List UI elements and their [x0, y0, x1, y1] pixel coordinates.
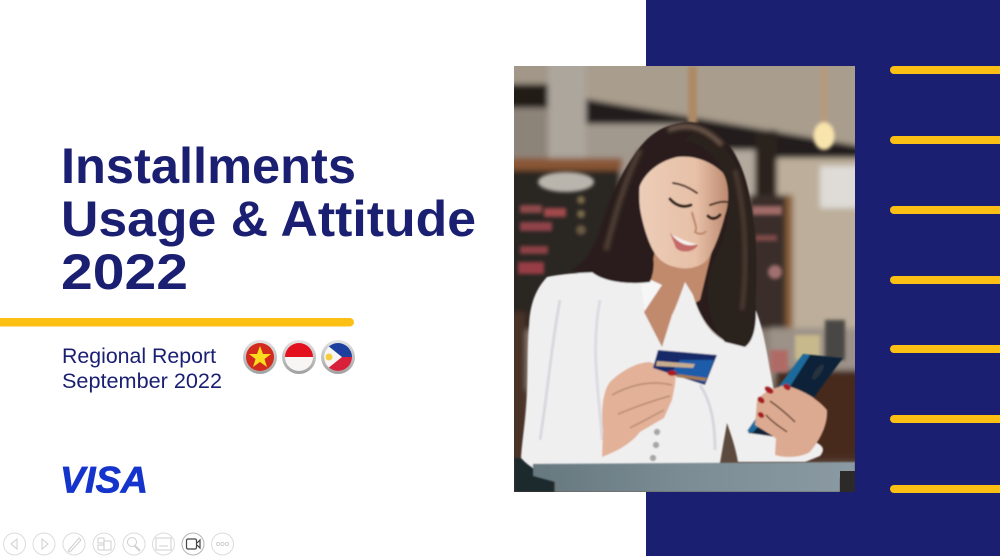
flag: Philippines — [321, 340, 355, 374]
icon: slides — [93, 533, 115, 555]
title — [61, 138, 476, 300]
title: 2022 — [61, 244, 188, 300]
nail: left hand — [668, 370, 676, 376]
hair back — [572, 122, 756, 347]
eyes and brows — [670, 183, 727, 219]
right hand holding phone — [755, 385, 827, 457]
title: Installments — [61, 138, 356, 194]
flag: Indonesia — [282, 340, 316, 374]
title: Usage & Attitude — [61, 191, 476, 247]
yellow stripes on navy panel — [890, 66, 1000, 493]
subtitle text: September 2022 — [62, 370, 222, 393]
navy side panel — [646, 0, 1000, 556]
Visa logo: VISA — [60, 460, 148, 500]
smile — [670, 233, 698, 252]
cafe background — [500, 60, 870, 462]
icon: previous — [4, 533, 26, 555]
phone — [747, 354, 843, 437]
country flags — [243, 340, 355, 374]
hair front strands — [592, 186, 655, 284]
subtitle text: Regional Report — [62, 345, 216, 368]
presentation toolbar icons — [4, 533, 234, 555]
table top — [533, 462, 855, 492]
icon: more — [212, 533, 234, 555]
face — [638, 157, 728, 268]
pendant bulb — [688, 66, 834, 150]
subtitle text — [62, 345, 222, 393]
photo: woman with card and phone in cafe — [500, 60, 870, 492]
credit card — [653, 350, 717, 385]
shirt buttons — [650, 429, 660, 461]
yellow divider bar — [0, 318, 354, 326]
icon: pen — [63, 533, 85, 555]
table base left — [514, 458, 554, 492]
flag: Vietnam — [243, 340, 277, 374]
neck and chest — [644, 250, 712, 347]
icon: subtitles — [152, 533, 174, 555]
icon: zoom — [123, 533, 145, 555]
icon: next — [33, 533, 55, 555]
chalkboard writing — [518, 172, 845, 372]
nails: right hand — [756, 382, 792, 419]
icon: camera — [182, 533, 204, 555]
left hand holding card — [602, 362, 676, 457]
white shirt — [521, 272, 823, 476]
woman — [521, 122, 843, 476]
